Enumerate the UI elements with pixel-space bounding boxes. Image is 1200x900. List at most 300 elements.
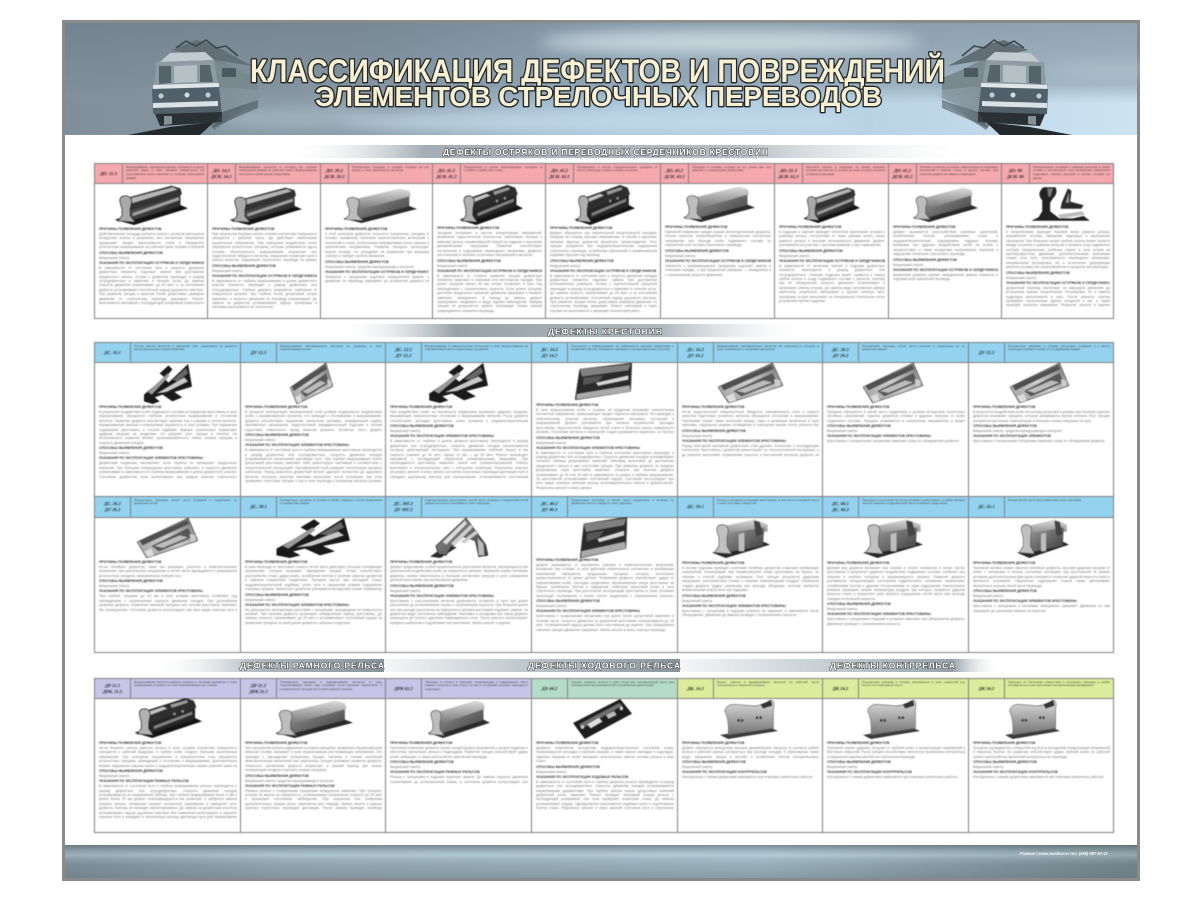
text: causes: УКАЗАНИЯ ПО ЭКСПЛУАТАЦИИ ЭЛЕМЕНТОВ КРЕСТОВИНЫ (827, 434, 931, 438)
icon: frog (274, 518, 350, 558)
text: causes: СПОСОБЫ ВЫЯВЛЕНИЯ ДЕФЕКТОВ (973, 589, 1037, 593)
header: ДС 20.2: ДУ 20.2 (833, 352, 848, 358)
cell: ДУ 12.3 (240, 342, 386, 497)
cell: ДС 40.2 (531, 496, 678, 653)
text: causes: Крестовины с поперечными трещинами заменяют сразу по обнаружении дефекта. (973, 439, 1105, 443)
text: causes: УКАЗАНИЯ ПО ЭКСПЛУАТАЦИИ ОСТРЯКОВ И СЕРДЕЧНИКОВ (99, 261, 204, 265)
text: causes: Визуальный осмотр, средства неразрушающего контроля (245, 779, 334, 783)
header: ДО 11.3 (95, 164, 207, 184)
cell: ДС 20.2 (822, 342, 969, 497)
text: causes: УКАЗАНИЯ ПО ЭКСПЛУАТАЦИИ КОНТРРЕЛЬСОВ (827, 770, 912, 774)
header: ДРК 65.2 (386, 679, 531, 699)
cell: ДС 30Г.2 (385, 496, 532, 653)
text: causes: ПРИЧИНЫ ПОЯВЛЕНИЯ ДЕФЕКТОВ (212, 227, 274, 231)
text: causes: Трещины зарождаются у отверстий под болты вследствие концентрации напряжений и перекоса болтов. Их развитию способствуют удары гребней колёс по рабочей грани и расстройство креплений контррельса на переводе. (973, 746, 1110, 759)
text: causes (892, 224, 998, 282)
text: causes: Визуальный осмотр (212, 269, 242, 273)
cell: ДС 28.1 (240, 496, 386, 653)
header: ДУ 12.3 (241, 343, 385, 363)
cell: ДО 65.2 (888, 163, 1002, 319)
footer band (62, 845, 1140, 881)
header: ДС 20.2: ДС. 20.2 (832, 346, 849, 352)
text: causes: ПРИЧИНЫ ПОЯВЛЕНИЯ ДЕФЕКТОВ (1006, 225, 1068, 229)
text: causes: СПОСОБЫ ВЫЯВЛЕНИЯ ДЕФЕКТОВ (325, 260, 389, 264)
cell: ДС 65.1 (968, 496, 1114, 653)
text: causes: СПОСОБЫ ВЫЯВЛЕНИЯ ДЕФЕКТОВ (973, 424, 1037, 428)
text: causes (682, 741, 819, 781)
header: ДО 20.2: Поперечные трещины в головке остряка на его длине, в зоне закалённого металла (352, 164, 429, 172)
header: ДС 12.2 (386, 343, 531, 363)
text: causes: ПРИЧИНЫ ПОЯВЛЕНИЯ ДЕФЕКТОВ (893, 225, 955, 229)
header: ДРК 65.2: Трещины и отколы в подошве, возникающие у подрезанной части рамного рельса в зоне опор и в месте установки упорных накладок и подкладок (425, 680, 528, 691)
text: causes: УКАЗАНИЯ ПО ЭКСПЛУАТАЦИИ ОСТРЯКОВ И СЕРДЕЧНИКОВ (212, 274, 317, 278)
text: causes (664, 224, 772, 278)
text: causes: ПРИЧИНЫ ПОЯВЛЕНИЯ ДЕФЕКТОВ (779, 225, 841, 229)
text: causes: Дефекты появляются вследствие неудовлетворительного состояния стыка, неравномерной просадки и наличия зазоров, а также износа накладок и подкладок. Ударные нагрузки от колёс вызывают пластическое смятие головки рельса в зоне стыка. (536, 746, 674, 763)
header: ДС 60.1: ДС. 60.2 (832, 507, 849, 512)
header: ДС 26.2: ДС. 26.2 (104, 501, 121, 506)
header: ДС 60.1 (823, 497, 968, 518)
text: causes: СПОСОБЫ ВЫЯВЛЕНИЯ ДЕФЕКТОВ (893, 258, 957, 262)
text: causes: Визуальный осмотр (390, 589, 420, 593)
header: ДО 11.3: ДО. 11.3 (100, 170, 117, 176)
text: causes: Контррельсы с такими дефектами заменяются при плановых ремонтных работах. (973, 775, 1104, 779)
text: causes: Из-за литейных дефектов, таких как раковины, рыхлоты и неметаллические включения, при циклическом нагружении в литой части зарождаются и развиваются усталостные трещины, направленные поперёк оси. (99, 565, 237, 578)
cell: ДР 11.2 (94, 678, 241, 833)
text: causes: СПОСОБЫ ВЫЯВЛЕНИЯ ДЕФЕКТОВ (1006, 271, 1070, 275)
text: causes (99, 741, 237, 821)
text: causes: УКАЗАНИЯ ПО ЭКСПЛУАТАЦИИ РАМНЫХ РЕЛЬСОВ (245, 784, 335, 788)
header: ДО 65.2 (889, 164, 1001, 184)
header: ДР 11.2: Выкрашивание металла рамного рельса по боковой выработке в зоне примыкания остряка и по зоне перекатывания на головке (134, 680, 237, 687)
icon: frog (289, 362, 334, 405)
text: causes: УКАЗАНИЯ ПО ЭКСПЛУАТАЦИИ ОСТРЯКОВ И СЕРДЕЧНИКОВ (779, 259, 885, 263)
text: causes: СПОСОБЫ ВЫЯВЛЕНИЯ ДЕФЕКТОВ (550, 259, 614, 263)
text: causes (245, 741, 382, 812)
header: ДК 24.2 (823, 679, 968, 699)
text: causes (98, 226, 204, 306)
text: causes: Визуальный осмотр (1006, 276, 1036, 280)
text: causes: Визуальный осмотр (390, 765, 420, 769)
text: causes: УКАЗАНИЯ ПО ЭКСПЛУАТАЦИИ КОНТРРЕЛЬСОВ (682, 770, 767, 774)
header: ДС 12.2: ДУ 12.2 (396, 352, 411, 358)
header: ДС 50.1: ДС. 50.1 (687, 504, 704, 509)
header: ДО 42.2: ДСН. 42.2 (549, 174, 570, 178)
text: causes: СПОСОБЫ ВЫЯВЛЕНИЯ ДЕФЕКТОВ (779, 249, 843, 253)
cell: ДК 14.2 (677, 678, 823, 833)
text: causes (98, 560, 238, 612)
text: causes: Дефект образуется при значительной эксцентричной передаче нагрузки на головку, высоких напряжениях от изгиба и кручения, наличии скрытых дефектов прокатного происхождения. Рост трещин ускоряется при неудовлетворительном содержании стрелочного перевода, ослаблении скреплений и неравномерной подбивке брусьев под перевод. (550, 231, 657, 257)
header: ДС 30Г.2: Горизонтальные расслоения литой части усовика и сердечника из-за дефектов литья и наплавки в зоне перехода (425, 498, 528, 505)
text: causes: СПОСОБЫ ВЫЯВЛЕНИЯ ДЕФЕКТОВ (245, 593, 309, 597)
text: causes: Визуальный осмотр (682, 599, 712, 603)
text: causes: СПОСОБЫ ВЫЯВЛЕНИЯ ДЕФЕКТОВ (682, 594, 746, 598)
header: ДО 80: ДСН. 80 (1007, 174, 1024, 178)
text: causes: ПРИЧИНЫ ПОЯВЛЕНИЯ ДЕФЕКТОВ (682, 741, 744, 745)
header: ДО 61.3: ДО. 61.3 (780, 168, 797, 172)
header: ДР 11.2: ДРК. 11.2 (103, 688, 122, 694)
table: stock rail, running rail and guard rail defects (94, 678, 1114, 833)
text: causes (826, 404, 966, 444)
text: causes: Крестовины с продольными трещинами при длине более допустимой заменяют в течение суток. Скорость движения по дефектной крестовине ограничивается до 25 км/ч. Установленный надзор должен быть постоянным до замены. При обнаружении сквозных трещин движение закрывают. Запись вносят в книгу осмотра перевода. (536, 614, 674, 632)
icon: frog (574, 362, 633, 401)
text: causes: Визуальный осмотр (245, 438, 275, 442)
header: ДС 30Г.2 (386, 497, 531, 518)
header: ДС 10.1: Отлом частей металла в наружной зоне сердечника по дефекту металлургического происхождения (134, 344, 237, 351)
table: frog defects (93, 341, 1115, 654)
text: causes (972, 404, 1110, 444)
header: ДУ 22.2: Поперечные трещины в головке рельсовых усовиков и в месте перехода головки в шейку не по дефектам сварки (1008, 344, 1110, 351)
text: causes: Не допускается эксплуатация крестовин с трещинами, выходящими на поверхность катания. При наличии дефекта организуют немедленную замену крестовины. До замены скорость ограничивают до 25 км/ч и устанавливают постоянный надзор за развитием трещины по всей длине дефекта с записью в журнале. (245, 608, 382, 625)
header: ДО 43.2: Трещины в головке остряка на его длине вне зон закалки и с прокатными дефектами (692, 164, 771, 172)
text: causes: УКАЗАНИЯ ПО ЭКСПЛУАТАЦИИ ОСТРЯКОВ И СЕРДЕЧНИКОВ (437, 269, 542, 273)
text: causes: Визуальный осмотр (99, 774, 129, 778)
header: ДО 65.2: ДСН. 65.2 (892, 174, 913, 178)
text: causes: ПРИЧИНЫ ПОЯВЛЕНИЯ ДЕФЕКТОВ (536, 741, 598, 745)
cell: ДО 80 (1001, 163, 1114, 319)
header: ДС 30Г.2: ДС. 30Г.2 (394, 501, 413, 506)
text: causes (778, 224, 886, 304)
text: causes: ПРИЧИНЫ ПОЯВЛЕНИЯ ДЕФЕКТОВ (682, 405, 744, 409)
cell: ДРК 65.2 (385, 678, 532, 833)
header: ДС 40.2 (532, 497, 677, 518)
header: ДО 80 (1002, 164, 1113, 184)
cell: ДС 10.1 (94, 342, 241, 497)
text: causes (436, 226, 542, 314)
icon: guard rail (720, 698, 778, 738)
cell: ДС 14.2 (531, 342, 678, 497)
icon: frog (717, 362, 784, 404)
train right (932, 40, 1072, 135)
text: causes: ПРИЧИНЫ ПОЯВЛЕНИЯ ДЕФЕКТОВ (665, 225, 727, 229)
text: causes: Контррельсы с такими дефектами заменяются при плановых ремонтных работах. (827, 775, 958, 779)
header: ДХ 44.2: ДХ 44.2 (542, 686, 557, 690)
header: ДС 40.2: Продольные трещины в литой части сердечника и усовика по дефектам литья и сварки в зоне подошвы (571, 498, 674, 505)
header: ДК 34.2: ДК 34.2 (979, 686, 994, 690)
header: ДО 43.2: ДО. 43.2 (666, 168, 683, 172)
header: ДР 11.2 (95, 679, 240, 699)
text: causes: СПОСОБЫ ВЫЯВЛЕНИЯ ДЕФЕКТОВ (99, 446, 163, 450)
text: causes: УКАЗАНИЯ ПО ЭКСПЛУАТАЦИИ ЭЛЕМЕНТОВ КРЕСТОВИНЫ (827, 612, 931, 616)
cell: ДС 16.2 (677, 342, 823, 497)
text: causes: Выявление дефекта требует немедленной замены элемента и подтяжки всех креплений перевода. (893, 273, 998, 281)
text: causes: СПОСОБЫ ВЫЯВЛЕНИЯ ДЕФЕКТОВ (682, 760, 746, 764)
text: causes (536, 558, 674, 633)
text: causes (1005, 224, 1110, 308)
text: causes: ПРИЧИНЫ ПОЯВЛЕНИЯ ДЕФЕКТОВ (682, 561, 744, 565)
text: causes: СПОСОБЫ ВЫЯВЛЕНИЯ ДЕФЕКТОВ (973, 760, 1037, 764)
text: causes: Визуальный осмотр (550, 264, 580, 268)
text: causes: Визуальный осмотр (665, 254, 695, 258)
train left (128, 40, 268, 135)
header: ДС 26.2: ДУ 26.2 (105, 507, 120, 512)
header: ДО 41.2: ДО. 41.2 (438, 168, 455, 172)
text: causes: УКАЗАНИЯ ПО ЭКСПЛУАТАЦИИ ЭЛЕМЕНТОВ КРЕСТОВИНЫ (390, 594, 494, 598)
text: causes: Причиной излома служат скрытые литейные дефекты, высокие ударные нагрузки от колёс с ползунами и плохое состояние основания под крестовиной. В зимних условиях дополнительным фактором становится снижение ударной вязкости стали и жёсткость основания. Нарушения содержания стыков также увеличивают вероятность излома литой части перевода. (973, 566, 1110, 588)
cell: ДХ 44.2 (531, 678, 678, 833)
text: causes: СПОСОБЫ ВЫЯВЛЕНИЯ ДЕФЕКТОВ (245, 774, 309, 778)
text: causes: Визуальный осмотр (99, 256, 129, 260)
cell: ДО 41.2 (432, 163, 546, 319)
heading: defects of switch rails and frogs: ДЕФЕКТЫ ОСТРЯКОВ И ПЕРЕВОДНЫХ СЕРДЕЧНИКОВ КРЕСТОВИН (443, 147, 768, 157)
text: causes: Визуальный осмотр (973, 765, 1003, 769)
text: causes (324, 226, 430, 284)
header: ДО 43.2 (661, 164, 774, 184)
text: causes: Крестовины с трещинами в подошве и усовиках заменяют при обнаружении дефекта. Движение проводят с ограничением скорости. (827, 617, 965, 626)
cell: ДС 26.2 (94, 496, 241, 653)
header: ДО 80: Неприлегание остряков к рамным рельсам в зонах острия и контрольной тяги, вследствие нарушения подкладок, износа деталей и изгиба остряка по длине (1033, 164, 1110, 180)
text: causes: СПОСОБЫ ВЫЯВЛЕНИЯ ДЕФЕКТОВ (99, 251, 163, 255)
icon: rail (132, 698, 202, 738)
text: causes (390, 560, 528, 626)
header: ДК 34.2 (969, 679, 1113, 699)
header: ДО 11.3: Выкрашивание, преимущественно, остряка в сторону рабочей грани и зоне боковой поверхности на подошвенной части, начиная от головки переходной кривой (126, 164, 204, 180)
text: causes: УКАЗАНИЯ ПО ЭКСПЛУАТАЦИИ ЭЛЕМЕНТОВ КРЕСТОВИНЫ (682, 439, 786, 443)
text: causes: УКАЗАНИЯ ПО ЭКСПЛУАТАЦИИ РАМНЫХ РЕЛЬСОВ (390, 770, 480, 774)
cell: ДУ 22.2 (968, 342, 1114, 497)
text: causes: ПРИЧИНЫ ПОЯВЛЕНИЯ ДЕФЕКТОВ (973, 561, 1035, 565)
text: causes: УКАЗАНИЯ ПО ЭКСПЛУАТАЦИИ ЭЛЕМЕНТОВ (973, 434, 1051, 438)
header: ДС 14.2: ДС. 14.2 (541, 346, 558, 352)
header: ДС 28.1: ДС. 28.1 (250, 504, 267, 509)
header: ДО 20.2: ДО. 20.2 (326, 168, 343, 172)
text: causes: УКАЗАНИЯ ПО ЭКСПЛУАТАЦИИ ЭЛЕМЕНТОВ КРЕСТОВИНЫ (390, 434, 494, 438)
heading: stock rail, running rail and guard rail defects: ДЕФЕКТЫ ХОДОВОГО РЕЛЬСА (528, 660, 680, 670)
text: causes: СПОСОБЫ ВЫЯВЛЕНИЯ ДЕФЕКТОВ (682, 429, 746, 433)
header: ДК 14.2: Выкол, смятие и выкрашивание металла на рабочей части контррельса с обратной стороны (717, 680, 819, 687)
text: causes: ПРИЧИНЫ ПОЯВЛЕНИЯ ДЕФЕКТОВ (827, 741, 889, 745)
cell: ДС 50.1 (677, 496, 823, 653)
text: causes: СПОСОБЫ ВЫЯВЛЕНИЯ ДЕФЕКТОВ (437, 259, 501, 263)
text: causes: В зависимости от состояния пути и глубины отслоения крестовины переводят в разряд дефектных или остродефектных. Скорость движения поездов устанавливают согласно таблице допускаемых значений. Наплавку выполняют до достижения предельного износа и при отсутствии трещин. При развитии дефекта за пределы допускаемых норм крестовину заменяют. Скорость при наличии дефекта ограничивают до 40 или 25 км/ч в зависимости от длины и глубины выкрашивания. За крестовиной устанавливают постоянный надзор. Состояние контролируют при всех видах осмотра, включая проход путеизмерительного вагона и дефектоскопа. Результаты заносят в книгу записи. (536, 451, 674, 490)
header: ДС 16.2: Выкрашивание наплавленного металла на поверхности катания в зоне сопряжения с основным металлом (717, 344, 819, 351)
title: ЭЛЕМЕНТОВ СТРЕЛОЧНЫХ ПЕРЕВОДОВ (315, 81, 882, 112)
header: ДО 61.3: ДСН. 61.3 (778, 174, 799, 178)
header: ДК 14.2 (678, 679, 822, 699)
text: causes: ПРИЧИНЫ ПОЯВЛЕНИЯ ДЕФЕКТОВ (390, 405, 452, 409)
text: causes: УКАЗАНИЯ ПО ЭКСПЛУАТАЦИИ ЭЛЕМЕНТОВ КРЕСТОВИНЫ (536, 446, 640, 450)
header: ДС 50.1: Излом и трещины в подошве крестовины, в том числе в пазовой части и зоне болтовых отверстий (717, 498, 819, 505)
text: causes: В зависимости от состояния пути и скорости движения поездов дефектные элементы подлежат замене при достижении установленных размеров. Остряк с горизонтальной трещиной переводят в разряд остродефектных и заменяют в течение суток. До замены скорость ограничивают до 25 км/ч, а за состоянием дефекта устанавливают постоянный надзор дорожного мастера. При развитии трещин более допустимых размеров движение по стрелочному переводу закрывают. Ремонт наплавкой в таких случаях не выполняется и запрещён технологией работ. (550, 274, 657, 313)
header: ДР 21.2 (241, 679, 385, 699)
text: causes (549, 226, 658, 314)
header: ДР 21.2: Поперечные трещины и выкрашивание металла в зоне перекатывания колёс над остряком из-за наличия закалочных и шлифовочных трещин на головке рамного рельса (280, 680, 382, 691)
text: causes: Визуальный осмотр (437, 264, 467, 268)
text: causes: В зависимости от степени развития трещин дефектные элементы заменяют в плановом или неотложном порядке. При длине трещины менее 30 мм остряк оставляют в пути под наблюдением с ограничением скорости. Если длина трещины достигает предельных значений, движение закрывают и элемент заменяют немедленно. В период до замены дефект осматривают ежедневно и ведут журнал наблюдений. Заварка трещин не допускается, ремонт производят только сменой повреждённого элемента перевода. (437, 274, 542, 313)
icon: fishplate (572, 698, 632, 738)
header: ДС 40.2: ДС. 40.2 (541, 501, 558, 506)
text: causes: Визуальный осмотр, средства неразрушающего контроля (973, 429, 1062, 433)
text: causes: Данный вид дефекта возникает при изломе и отколе элементов в литых частях крестовины в результате ударного воздействия подвижного состава, особенно при наличии в колёсах ползунов и неравномерного проката. Развитие дефекта усиливается ненадлежащим состоянием подрельсового основания, перекосами, ослаблением болтов и другими отступлениями от норм содержания. Значительное влияние оказывают низкие температуры воздуха, при которых снижается ударная вязкость стали и возрастает риск хрупкого разрушения литой части при проходе поездов на большой скорости. (827, 566, 965, 601)
text: causes: УКАЗАНИЯ ПО ЭКСПЛУАТАЦИИ ЭЛЕМЕНТОВ КРЕСТОВИНЫ (245, 443, 349, 447)
text: causes: Крестовины с трещинами и изломами немедленно заменяют. Движение по ним закрывают до окончания замены на перегоне. (973, 604, 1110, 613)
header: ДС 30Г.2: ДУ 30Г.2 (395, 507, 412, 512)
table: switch rail defects (93, 162, 1115, 320)
header: ДО 42.2: Продольные и косые горизонтальные трещины в месте перехода головки в шейку по длине (577, 164, 657, 172)
icon: guard rail (862, 698, 920, 738)
text: causes: УКАЗАНИЯ ПО ЭКСПЛУАТАЦИИ ОСТРЯКОВ И СЕРДЕЧНИКОВ (325, 270, 429, 274)
header: ДК 24.2: ДК 24.2 (833, 686, 848, 690)
text: causes: ПРИЧИНЫ ПОЯВЛЕНИЯ ДЕФЕКТОВ (827, 561, 889, 565)
icon: rail (682, 186, 756, 223)
text: causes (535, 402, 674, 490)
text: causes: СПОСОБЫ ВЫЯВЛЕНИЯ ДЕФЕКТОВ (390, 760, 454, 764)
text: causes: СПОСОБЫ ВЫЯВЛЕНИЯ ДЕФЕКТОВ (536, 765, 600, 769)
text: causes: ПРИЧИНЫ ПОЯВЛЕНИЯ ДЕФЕКТОВ (437, 226, 499, 230)
header: ДС 12.2: Выкрашивание и поверхностные отслоения в зоне перекатывания на наплавленной части сердечника и усовиков (425, 344, 528, 351)
header: ДС 16.2: ДУ 16.2 (688, 352, 703, 358)
header: ДС 20.2: Поперечные трещины литой части усовика и сердечника не по дефектам сварки (862, 344, 965, 351)
text: causes: Причиной появления дефекта служат концентрация напряжений у кромок подрезки и неплотное прилегание рельса к подкладкам. Развитию трещин способствуют удары колёс, вибрации, а также расстройство креплений перевода. (390, 746, 528, 759)
icon: rail cross-section (1031, 186, 1090, 222)
text: causes: ПРИЧИНЫ ПОЯВЛЕНИЯ ДЕФЕКТОВ (973, 741, 1035, 745)
icon: frog (862, 362, 924, 404)
text: causes: Визуальный осмотр (245, 598, 275, 602)
header: ДС 50.1 (678, 497, 822, 518)
text: causes: Крестовины с поперечными трещинами заменяют сразу по обнаружении дефекта. (827, 439, 959, 443)
text: causes (390, 741, 528, 785)
text: causes: К этой категории дефектов относятся поперечные трещины в головке, вызванные наличием неметаллических включений и скоплений в стали, остаточными напряжениями после закалки и циклическим нагружением. Развитие трещины происходит внутри головки, что затрудняет её выявление при внешнем осмотре и требует особого внимания. (325, 232, 429, 258)
cell: ДО 20.2 (320, 163, 433, 319)
text: causes: СПОСОБЫ ВЫЯВЛЕНИЯ ДЕФЕКТОВ (245, 433, 309, 437)
text: causes: Визуальный осмотр (827, 607, 857, 611)
header: ДС 14.2: ДУ 14.2 (542, 352, 557, 358)
icon: frog (1009, 362, 1070, 404)
header: ДК 24.2: Поперечная трещина в головке контррельса в зоне отверстий под болты и в переходной части (862, 680, 965, 687)
header: ДР 21.2: ДР 21.2 (251, 682, 266, 688)
icon: rail (574, 184, 636, 226)
text: causes: Дефект представляет собой горизонтальное расслоение металла, образующееся при циклическом воздействии колёс на поверхность катания. Причиной служат литейные дефекты, низкая пластичность и большие контактные нагрузки в зоне сопряжения деталей крестовины при интенсивном движении. (390, 565, 528, 582)
header: ДС 26.2: Поперечные трещины литой части усовиков и сердечника по дефектам литья (134, 498, 237, 505)
heading: stock rail, running rail and guard rail defects: ДЕФЕКТЫ КОНТРРЕЛЬСА (830, 660, 955, 670)
icon: frog (136, 517, 199, 559)
icon: frog section (430, 518, 488, 558)
header: ДС 10.1 (95, 343, 240, 363)
header: ДС 40.2: ДУ 40.2 (542, 507, 557, 512)
text: causes: Визуальный осмотр (682, 765, 712, 769)
header: ДУ 12.3: Выкрашивание наплавленного металла на усовиках в зоне перекатывания колёс (280, 344, 382, 351)
text: causes: УКАЗАНИЯ ПО ЭКСПЛУАТАЦИИ КОНТРРЕЛЬСОВ (973, 770, 1058, 774)
text: causes: Визуальный осмотр (827, 429, 857, 433)
text: causes (682, 561, 819, 619)
text: causes (681, 404, 820, 458)
header: ДУ 12.3: ДУ 12.3 (251, 350, 266, 354)
cell: ДК 34.2 (968, 678, 1114, 833)
text: causes: СПОСОБЫ ВЫЯВЛЕНИЯ ДЕФЕКТОВ (665, 249, 729, 253)
text: causes: К излому подошвы приводит сочетание литейных дефектов и высоких изгибающих напряжений, возникающих при неравномерной опоре крестовины на брусья, их гниении и плохой подбивке основания. Рост трещин ускоряется ударными нагрузками, расстройством стыков и низкими температурами воздуха. Начальная стадия дефекта трудно различима при проходе обходчика, поэтому требуется внимательный осмотр всех зон подошвы. (682, 566, 819, 592)
text: causes: СПОСОБЫ ВЫЯВЛЕНИЯ ДЕФЕКТОВ (390, 424, 454, 428)
text: causes: ПРИЧИНЫ ПОЯВЛЕНИЯ ДЕФЕКТОВ (99, 227, 161, 231)
text: causes: ПРИЧИНЫ ПОЯВЛЕНИЯ ДЕФЕКТОВ (536, 403, 598, 407)
heading: defects of switch rails and frogs (327, 145, 904, 158)
header: ДРК 65.2: ДРК 65.2 (394, 686, 413, 690)
text: causes (98, 404, 238, 480)
text: causes: Визуальный осмотр (779, 254, 809, 258)
icon: rail (272, 700, 352, 738)
text: causes: Визуальный осмотр (390, 429, 420, 433)
header: ДО 65.2: ДО. 65.2 (894, 168, 911, 172)
icon: rail (803, 187, 860, 224)
icon: rail (343, 188, 418, 224)
text: causes: ПРИЧИНЫ ПОЯВЛЕНИЯ ДЕФЕКТОВ (99, 405, 161, 409)
text: causes: Крестовины с расслоениями металла допускается оставлять в пути при длине расслоения до установленной нормы с ограничением скорости. При большей длине или при выходе расслоения на поверхность катания крестовина подлежит замене. За дефектом ведут постоянное наблюдение. Наплавка и шлифовка при таком дефекте запрещены до полного удаления повреждённого слоя. После ремонта контролируют профиль шаблоном и подтягивают все крепления. Запись вносят в журнал. (390, 599, 528, 625)
text: causes: УКАЗАНИЯ ПО ЭКСПЛУАТАЦИИ ОСТРЯКОВ И СЕРДЕЧНИКОВ (665, 259, 771, 263)
text: causes: УКАЗАНИЯ ПО ЭКСПЛУАТАЦИИ ОСТРЯКОВ И СЕРДЕЧНИКОВ (893, 268, 998, 272)
icon: guard rail (1004, 698, 1060, 738)
icon: frog (580, 516, 628, 558)
text: causes: Элементы с развивающимися трещинами подлежат замене в плановом порядке, а при предельных размерах — немедленно и с ограничением скорости движения. (665, 264, 771, 277)
text: causes: Визуальный осмотр (536, 604, 566, 608)
text: causes: СПОСОБЫ ВЫЯВЛЕНИЯ ДЕФЕКТОВ (827, 760, 891, 764)
header: ДО 14.2: Выкрашивание металла в остряке на головке переходной кривой на рабочей грани. Выкрашивание металла по всей длине сердечника (239, 164, 317, 176)
text: causes: СПОСОБЫ ВЫЯВЛЕНИЯ ДЕФЕКТОВ (99, 579, 163, 583)
text: causes: ПРИЧИНЫ ПОЯВЛЕНИЯ ДЕФЕКТОВ (827, 405, 889, 409)
heading: frog defects (369, 324, 766, 337)
text: causes: СПОСОБЫ ВЫЯВЛЕНИЯ ДЕФЕКТОВ (390, 584, 454, 588)
text: causes: ПРИЧИНЫ ПОЯВЛЕНИЯ ДЕФЕКТОВ (245, 741, 307, 745)
header: ДС 65.1: ДС. 65.1 (978, 504, 995, 509)
icon: frog block (712, 518, 770, 558)
text: causes (244, 404, 382, 484)
header: ДО 41.2: Продольные и косые вертикальные трещины в головке и шейке вне стыка (464, 164, 542, 172)
text: causes: УКАЗАНИЯ ПО ЭКСПЛУАТАЦИИ ЭЛЕМЕНТОВ КРЕСТОВИНЫ (536, 609, 640, 613)
text: causes: Визуальный осмотр, средства неразрушающего контроля (325, 265, 414, 269)
text: causes: ПРИЧИНЫ ПОЯВЛЕНИЯ ДЕФЕКТОВ (973, 405, 1035, 409)
text: causes: В результате воздействия колёс подвижного состава на сердечник крестовины в зоне перекатывания образуются глубокие усталостные выкрашивания и отслоения металла. Развитию дефекта способствует наличие пор и раковин в литом металле, неравномерная закалка и повышенная неровность в зоне усовика. При нарушении содержания крестовины и плохой подбивке брусьев значительно возрастают ударные нагрузки на сердечник, что ускоряет рост трещин и отколов. На интенсивность развития влияют грузонапряжённость линии, осевые нагрузки и скорость движения поездов. (99, 410, 237, 445)
header: ДС 12.2: ДС. 12.2 (395, 346, 412, 352)
text: causes: Причиной служат ударные нагрузки от гребней колёс и концентрация напряжений у болтовых отверстий. Росту трещин способствуют неплотное прилегание контррельса и нарушения ширины жёлоба на стрелочном переводе. (827, 746, 965, 759)
header: ДХ 44.2: Смятие ходового рельса в зоне стыка вне наплавленной части при наличии местных неровностей и ослаблении скреплений (571, 680, 674, 687)
cell: ДК 24.2 (822, 678, 969, 833)
text: causes: ПРИЧИНЫ ПОЯВЛЕНИЯ ДЕФЕКТОВ (325, 227, 387, 231)
text: causes: УКАЗАНИЯ ПО ЭКСПЛУАТАЦИИ ЭЛЕМЕНТОВ КРЕСТОВИНЫ (99, 456, 203, 460)
cell: ДО 11.3 (94, 163, 208, 319)
header: ДО 41.2: ДСН. 41.2 (436, 174, 457, 178)
header: ДР 11.2: ДР 11.2 (105, 682, 120, 688)
header: ДР 21.2: ДРК 21.2 (249, 688, 268, 694)
footer contacts: Разные | www.zavidov.ru тел. (495) 987-67-21 (1020, 851, 1109, 856)
text: causes: СПОСОБЫ ВЫЯВЛЕНИЯ ДЕФЕКТОВ (212, 264, 276, 268)
text: causes: ПРИЧИНЫ ПОЯВЛЕНИЯ ДЕФЕКТОВ (245, 405, 307, 409)
header: ДО 65.2: Изломы и смятия остряков, закрепления их корневых креплений в районе стыка, в других случаях при наличии дефектов сварки и подкладок (920, 164, 998, 176)
text: causes: Визуальный осмотр (682, 434, 712, 438)
text: causes: СПОСОБЫ ВЫЯВЛЕНИЯ ДЕФЕКТОВ (827, 424, 891, 428)
header: ДС 60.1: Трещины и отслоения на литом усовике и крестовине, а также обломы частей пазовой и подошвенной части в районе сердечника (862, 498, 965, 505)
text: causes: ПРИЧИНЫ ПОЯВЛЕНИЯ ДЕФЕКТОВ (99, 560, 161, 564)
header: ДО 14.2: ДО. 14.2 (213, 168, 230, 172)
text: causes: Визуальный осмотр (893, 263, 923, 267)
text: causes: УКАЗАНИЯ ПО ЭКСПЛУАТАЦИИ РАМНЫХ РЕЛЬСОВ (99, 779, 189, 783)
header: ДС 26.2 (95, 497, 240, 518)
header: ДС 14.2: Отслоение и выкрашивание на поверхности катания сердечника и усовиков в местах приварных накладок и на наплавленных участках (571, 344, 674, 351)
text: causes: УКАЗАНИЯ ПО ЭКСПЛУАТАЦИИ ЭЛЕМЕНТОВ КРЕСТОВИНЫ (245, 603, 349, 607)
header: ДО 43.2: ДСН. 43.2 (664, 174, 685, 178)
cell: ДР 21.2 (240, 678, 386, 833)
text: causes: ПРИЧИНЫ ПОЯВЛЕНИЯ ДЕФЕКТОВ (536, 558, 598, 562)
cell: ДО 61.3 (774, 163, 889, 319)
header: ДО 61.3 (775, 164, 888, 184)
header: ДО 80: ДО. 80 (1009, 168, 1022, 172)
header: ДХ 44.2 (532, 679, 677, 699)
header: ДО 61.3: Местный смятие и подрезка по всему сечению остряка на участке от острия до зоны полного сечения элемента перевода (806, 164, 885, 176)
banner (62, 20, 1140, 135)
text: causes: ПРИЧИНЫ ПОЯВЛЕНИЯ ДЕФЕКТОВ (390, 560, 452, 564)
header: ДС 16.2: ДС. 16.2 (687, 346, 704, 352)
text: causes: К неприлеганию приводят боковой износ рамного рельса, искривление остряка, смещение подкладок и загрязнение скользунов. При большом зазоре гребень колеса может попасть между остряком и рамным рельсом и вызвать сход подвижного состава. Неприлегание особенно опасно в зоне острия на противошёрстном движении. Дополнительными причинами служат угон пути, неисправности переводного механизма, неправильная регулировка тяг и остаточные деформации металла остряка при термообработке в процессе эксплуатации. (1006, 230, 1110, 269)
header: ДК 34.2: Трещины по болтовым отверстиям и сплошные трещины в шейке контррельса в зоне крепления контррельсовых вкладышей (1008, 680, 1110, 687)
text: causes (389, 404, 528, 480)
text: causes: УКАЗАНИЯ ПО ЭКСПЛУАТАЦИИ ЭЛЕМЕНТОВ КРЕСТОВИНЫ (973, 599, 1077, 603)
